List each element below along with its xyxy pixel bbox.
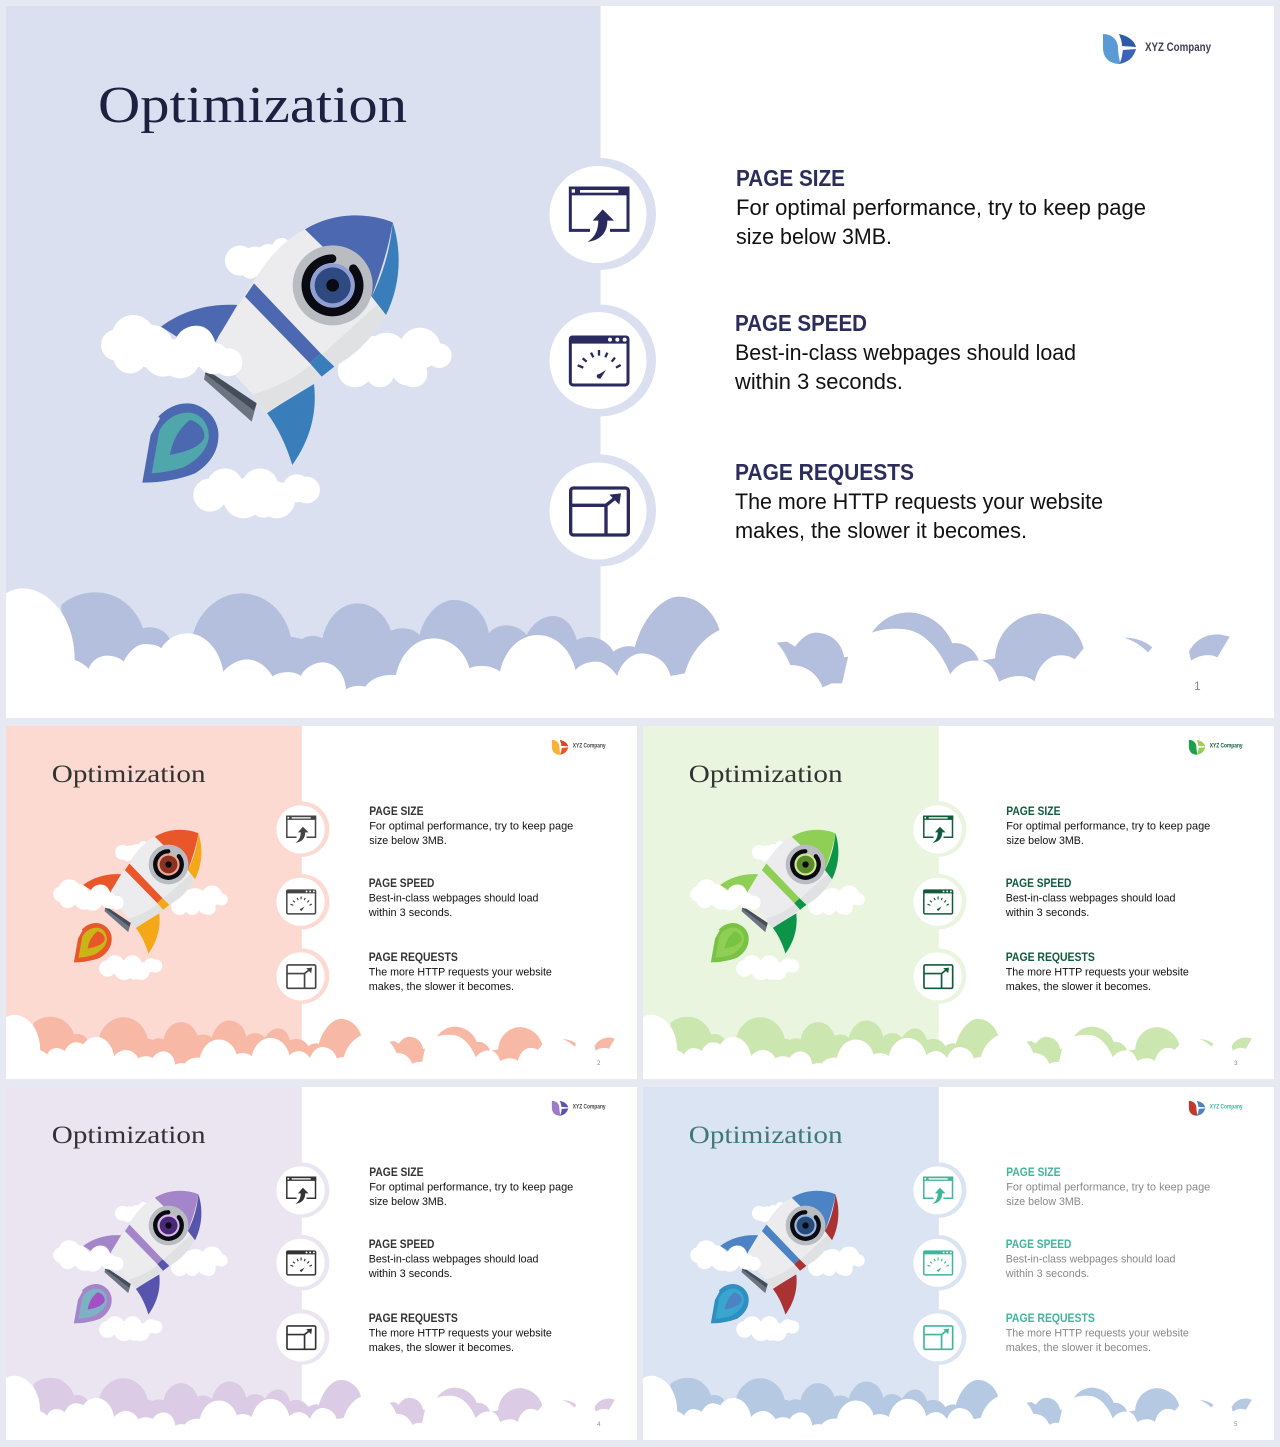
page number: 3 — [1234, 1061, 1238, 1067]
text block: page speed: within 3 seconds. — [368, 907, 452, 919]
text block: page speed: PAGE SPEED — [369, 1238, 434, 1251]
logo mark — [1189, 740, 1205, 755]
text block: page size: PAGE SIZE — [369, 805, 424, 818]
text block: page size: For optimal performance, try to keep page — [1006, 821, 1210, 833]
title: Optimization — [52, 759, 206, 788]
text block: page size: size below 3MB. — [369, 1196, 447, 1208]
cloud band — [6, 1015, 615, 1079]
logo text: XYZ Company — [573, 1104, 606, 1110]
slide background — [600, 6, 1274, 718]
text block: page size: PAGE SIZE — [736, 165, 845, 191]
left colour panel — [6, 6, 600, 718]
text block: page size — [1006, 805, 1210, 847]
logo mark — [1103, 34, 1136, 64]
text block: page speed: PAGE SPEED — [735, 310, 867, 336]
page number: 2 — [597, 1061, 601, 1067]
text block: page requests: PAGE REQUESTS — [1006, 951, 1095, 964]
cloud band — [6, 1376, 615, 1440]
text block: page requests: The more HTTP requests your website — [369, 1327, 552, 1339]
text block: page requests — [369, 951, 552, 993]
text block: page speed: Best-in-class webpages should load — [1006, 893, 1175, 905]
text block: page size — [370, 806, 573, 844]
icon: page requests — [544, 454, 656, 566]
text block: page size: size below 3MB. — [369, 835, 447, 847]
slide background — [643, 1087, 1274, 1440]
page number: 1 — [1194, 679, 1201, 693]
icon: page size — [544, 158, 656, 270]
left colour panel — [643, 726, 939, 1040]
text block: page requests: PAGE REQUESTS — [735, 459, 914, 485]
text block: page requests: PAGE REQUESTS — [1006, 1312, 1095, 1325]
text block: page requests: The more HTTP requests your website — [1006, 966, 1189, 978]
logo text: XYZ Company — [573, 743, 606, 749]
text block: page size: For optimal performance, try to keep page — [1006, 1182, 1210, 1194]
text block: page size: PAGE SIZE — [1006, 805, 1061, 818]
text block: page speed — [368, 1238, 538, 1280]
slide 1: large indigo slide — [6, 6, 1274, 718]
rocket illustration — [690, 830, 865, 980]
text block: page size: For optimal performance, try to keep page — [736, 195, 1146, 220]
text block: page requests — [369, 1312, 552, 1354]
page number: 4 — [597, 1422, 601, 1428]
text block: page requests — [735, 459, 1103, 543]
icon: page size — [274, 801, 329, 857]
title: Optimization — [52, 1120, 206, 1149]
icon: page requests — [911, 948, 966, 1004]
icon: page speed — [274, 874, 329, 930]
text block: page speed: Best-in-class webpages should load — [735, 340, 1076, 365]
cloud band — [643, 1015, 1252, 1079]
text block: page requests: makes, the slower it becomes. — [369, 1342, 514, 1354]
text block: page speed: PAGE SPEED — [369, 877, 434, 890]
text block: page size: size below 3MB. — [736, 224, 892, 249]
text block: page speed: Best-in-class webpages should load — [1006, 1254, 1175, 1266]
text block: page requests: The more HTTP requests your website — [735, 489, 1103, 514]
text block: page speed: Best-in-class webpages should load — [369, 1254, 538, 1266]
text block: page speed — [1005, 1238, 1175, 1280]
text block: page requests: makes, the slower it becomes. — [369, 981, 514, 993]
slide 2: coral variant — [6, 726, 637, 1079]
text block: page size: For optimal performance, try to keep page — [369, 821, 573, 833]
text block: page requests: makes, the slower it becomes. — [1006, 1342, 1151, 1354]
icon: page speed — [544, 304, 656, 416]
icon: page size — [911, 1162, 966, 1218]
left colour panel — [6, 726, 302, 1040]
text block: page size: size below 3MB. — [1006, 1196, 1084, 1208]
text block: page speed: within 3 seconds. — [368, 1268, 452, 1280]
icon: page requests — [274, 948, 329, 1004]
cloud band — [6, 588, 1230, 718]
title: Optimization — [98, 77, 407, 134]
text block: page speed: within 3 seconds. — [1005, 1268, 1089, 1280]
text block: page requests — [1006, 951, 1189, 993]
text block: page speed: PAGE SPEED — [1006, 1238, 1071, 1251]
text block: page size: PAGE SIZE — [369, 1166, 424, 1179]
text block: page requests: The more HTTP requests your website — [1006, 1327, 1189, 1339]
icon: page speed — [911, 1235, 966, 1291]
title: Optimization — [689, 1120, 843, 1149]
slide background — [302, 726, 637, 1079]
text block: page size — [369, 1166, 573, 1208]
text block: page requests: PAGE REQUESTS — [369, 1312, 458, 1325]
logo mark — [1189, 1101, 1205, 1116]
page number: 5 — [1234, 1422, 1238, 1428]
text block: page requests: The more HTTP requests your website — [369, 966, 552, 978]
logo text: XYZ Company — [1210, 1104, 1243, 1110]
slide background — [6, 1087, 637, 1440]
text block: page size: size below 3MB. — [1006, 835, 1084, 847]
icon: page requests — [274, 1309, 329, 1365]
logo text: XYZ Company — [1210, 743, 1243, 749]
text block: page speed — [735, 315, 1075, 389]
icon: page speed — [911, 874, 966, 930]
text block: page speed — [368, 878, 538, 916]
cloud band — [643, 1376, 1252, 1440]
slide background — [938, 726, 1274, 1079]
text block: page size — [1006, 1166, 1210, 1208]
icon: page requests — [911, 1309, 966, 1365]
icon: page size — [274, 1162, 329, 1218]
rocket illustration — [53, 1191, 228, 1341]
text block: page requests — [1006, 1312, 1189, 1354]
text block: page speed — [1005, 877, 1175, 919]
slide 3: green variant — [643, 726, 1274, 1079]
text block: page requests: makes, the slower it becomes. — [735, 518, 1027, 543]
slide 4: purple variant — [6, 1087, 637, 1440]
rocket illustration — [690, 1191, 865, 1341]
left colour panel — [643, 1087, 939, 1440]
logo mark — [552, 1101, 568, 1116]
icon: page speed — [274, 1235, 329, 1291]
rocket illustration — [101, 215, 452, 518]
text block: page requests: makes, the slower it becomes. — [1006, 981, 1151, 993]
title: Optimization — [689, 759, 843, 788]
text block: page speed: within 3 seconds. — [1005, 907, 1089, 919]
logo mark — [552, 740, 568, 755]
text block: page speed: Best-in-class webpages should load — [369, 893, 538, 905]
text block: page size: PAGE SIZE — [1006, 1166, 1061, 1179]
icon: page size — [911, 801, 966, 857]
rocket illustration — [53, 830, 228, 980]
text block: page requests: PAGE REQUESTS — [369, 951, 458, 964]
left colour panel — [6, 1087, 302, 1440]
text block: page size — [736, 170, 1145, 244]
text block: page speed: within 3 seconds. — [734, 369, 903, 394]
text block: page speed: PAGE SPEED — [1006, 877, 1071, 890]
slide 5: blue and teal variant — [643, 1087, 1274, 1440]
text block: page size: For optimal performance, try to keep page — [369, 1182, 573, 1194]
logo text: XYZ Company — [1145, 40, 1211, 54]
